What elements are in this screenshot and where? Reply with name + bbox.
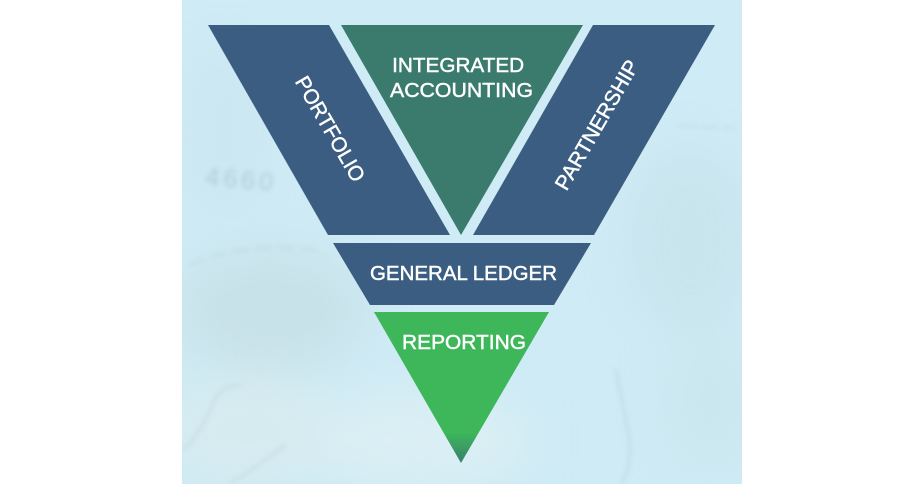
- label: integrated accounting: ACCOUNTING: [390, 79, 533, 102]
- panel: partnership: [473, 25, 715, 235]
- label: reporting: REPORTING: [402, 331, 526, 354]
- label: general ledger: GENERAL LEDGER: [370, 262, 557, 285]
- panel: portfolio: [208, 25, 450, 235]
- blurred map number: 4660: [204, 163, 278, 197]
- label: portfolio: PORTFOLIO: [290, 72, 369, 186]
- label: partnership: PARTNERSHIP: [551, 56, 644, 194]
- panel: reporting: [374, 312, 549, 463]
- background panel: faded map texture: [160, 0, 755, 484]
- panel: integrated accounting: [341, 25, 583, 235]
- label: integrated accounting: INTEGRATED: [392, 54, 524, 77]
- panel: general ledger: [333, 243, 591, 305]
